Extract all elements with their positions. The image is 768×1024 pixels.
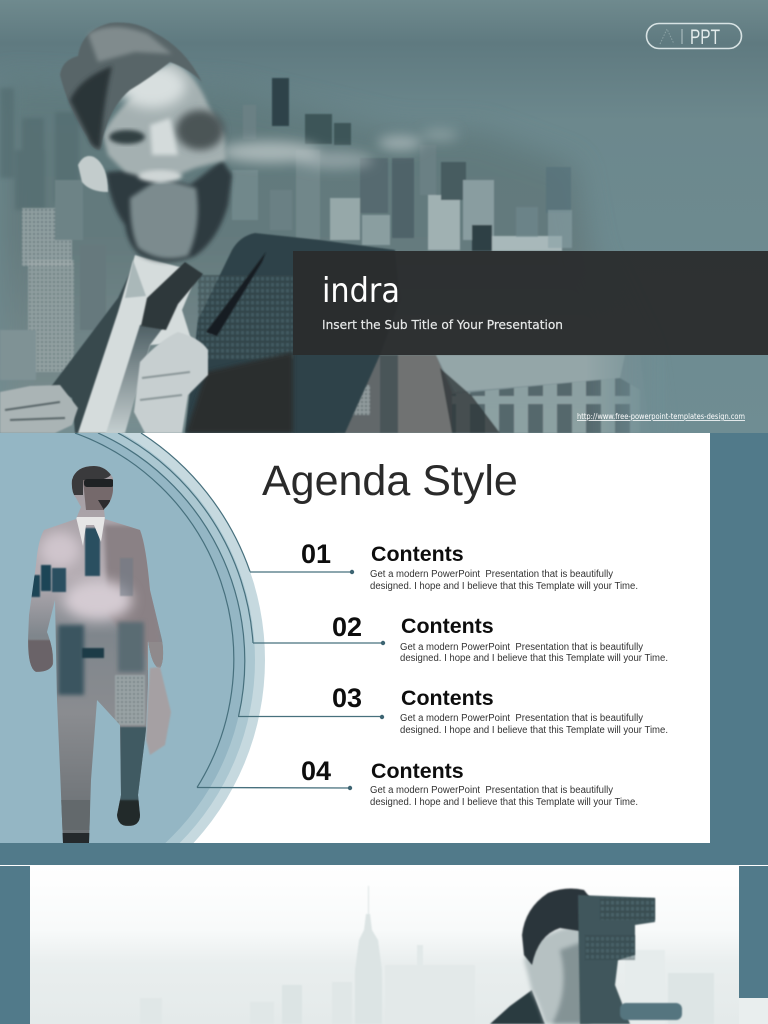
panel: agenda slide <box>0 433 768 865</box>
agenda item 01: designed. I hope and I believe that this Template will your Time. <box>370 581 638 592</box>
agenda item 01: Contents <box>371 542 464 566</box>
tie <box>106 325 165 433</box>
concentric circle graphic <box>0 433 265 843</box>
jacket right <box>185 233 400 433</box>
dark title band <box>293 251 768 355</box>
walking man double exposure <box>28 466 164 843</box>
agenda item 03: designed. I hope and I believe that this Template will your Time. <box>400 725 668 736</box>
agenda item 04: Contents <box>371 759 464 783</box>
face <box>103 62 226 182</box>
agenda item 02: Contents <box>401 614 494 638</box>
shirt <box>78 255 198 433</box>
agenda item 04: 04 <box>301 756 331 786</box>
panel: hero slide <box>0 0 768 433</box>
neck beard <box>106 160 232 262</box>
agenda item 02: 02 <box>332 612 362 642</box>
pale city photo <box>30 886 739 1024</box>
hair <box>60 22 202 150</box>
subtitle: Insert the Sub Title of Your Presentation <box>322 318 563 332</box>
title: indra <box>322 271 400 311</box>
agenda item 02: designed. I hope and I believe that this Template will your Time. <box>400 653 668 664</box>
panel: third slide <box>0 865 768 1024</box>
city skyline photo <box>0 78 665 433</box>
logo: PPT badge: PPT <box>690 26 720 49</box>
agenda item 03 <box>238 683 668 736</box>
agenda item 03: Get a modern PowerPoint Presentation that is beautifully <box>400 713 643 724</box>
agenda item 04: designed. I hope and I believe that this Template will your Time. <box>370 797 638 808</box>
agenda item 02: Get a modern PowerPoint Presentation that is beautifully <box>400 642 643 653</box>
heading: Agenda Style <box>262 457 518 505</box>
agenda item 01: Get a modern PowerPoint Presentation that is beautifully <box>370 569 613 580</box>
clouds <box>220 129 458 169</box>
logo: PPT badge <box>646 24 742 49</box>
agenda item 04 <box>197 756 638 808</box>
bag <box>146 667 171 755</box>
agenda item 04: Get a modern PowerPoint Presentation that is beautifully <box>370 785 613 796</box>
man portrait <box>0 22 400 433</box>
rooftop building <box>293 355 665 433</box>
agenda item 03: Contents <box>401 686 494 710</box>
jacket left <box>52 272 130 433</box>
agenda item 01 <box>250 539 638 592</box>
agenda item 01: 01 <box>301 539 331 569</box>
agenda item 03: 03 <box>332 683 362 713</box>
hands <box>0 385 78 433</box>
ear <box>78 156 108 192</box>
agenda item 02 <box>253 612 668 664</box>
smiling man double exposure <box>490 889 682 1024</box>
